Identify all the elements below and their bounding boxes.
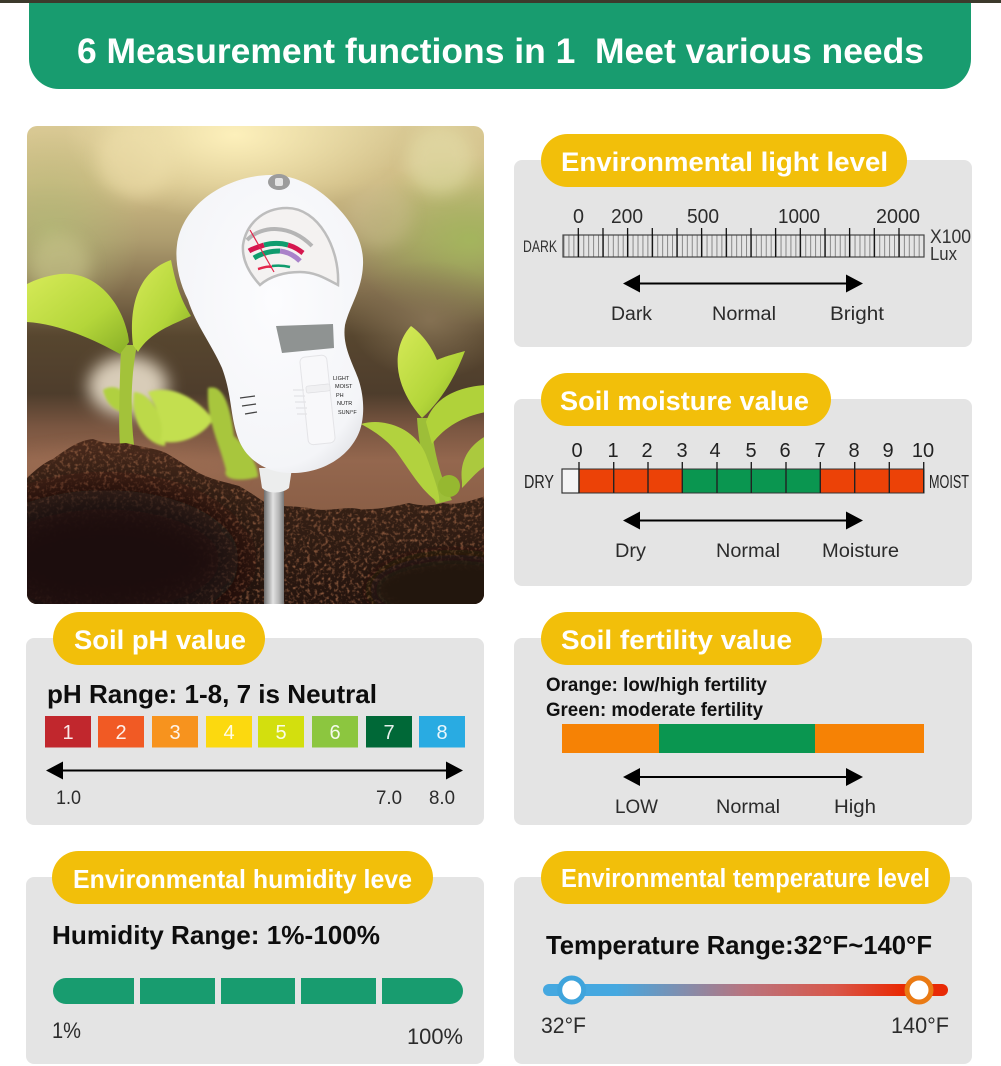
temperature slider labels xyxy=(541,1013,949,1038)
arrow labels: light: Dark xyxy=(611,304,653,325)
fertility legend text: Orange: low/high fertility xyxy=(546,675,767,696)
heading pill: pH: Soil pH value xyxy=(74,625,246,655)
pH colour scale: 7 xyxy=(383,722,395,744)
panel: soil pH value xyxy=(26,612,484,825)
pH colour scale: 4 xyxy=(223,722,235,744)
moisture scale: 5 xyxy=(745,440,757,462)
slider mode labels: MOIST xyxy=(335,384,353,390)
fertility arrow xyxy=(623,768,863,786)
heading pill: fertility xyxy=(541,612,822,665)
product photo: soil meter among seedlings xyxy=(27,126,484,604)
panel: soil moisture value xyxy=(514,373,972,586)
pH colour scale: 8 xyxy=(436,722,448,744)
heading pill: fertility: Soil fertility value xyxy=(561,625,792,655)
heading pill: light xyxy=(541,134,907,187)
fertility legend text xyxy=(546,675,767,721)
arrow: dry to moist xyxy=(623,512,863,530)
arrow labels: moisture: Normal xyxy=(716,541,780,562)
heading pill: pH xyxy=(53,612,265,665)
vent slots xyxy=(240,396,257,414)
temperature slider labels: 140°F xyxy=(891,1013,949,1038)
panel: soil fertility value xyxy=(514,612,972,825)
slider mode labels: LIGHT xyxy=(333,376,350,382)
heading pill: moisture xyxy=(541,373,831,426)
moisture scale: MOIST xyxy=(929,472,969,492)
pH colour scale: 5 xyxy=(275,722,287,744)
title: 6 Measurement functions in 1 Meet various needs xyxy=(77,32,924,71)
pH range text: pH Range: 1-8, 7 is Neutral xyxy=(47,679,377,709)
arrow: dark to bright xyxy=(623,274,863,292)
fertility arrow labels: LOW xyxy=(615,797,658,818)
fertility bar xyxy=(562,724,924,753)
moisture scale: 3 xyxy=(676,440,688,462)
top photo strip xyxy=(0,0,1001,3)
title banner xyxy=(29,3,971,89)
meter probe xyxy=(259,468,292,604)
moisture scale: 1 xyxy=(607,440,619,462)
fertility legend text: Green: moderate fertility xyxy=(546,700,763,721)
moisture scale: 4 xyxy=(709,440,721,462)
slider mode labels xyxy=(333,376,357,416)
humidity bar labels: 100% xyxy=(407,1024,463,1049)
soil xyxy=(27,439,484,604)
pH colour scale: 1 xyxy=(62,722,74,744)
fertility arrow labels: High xyxy=(834,797,876,818)
lux scale: 1000 xyxy=(778,206,820,228)
pH arrow labels: 8.0 xyxy=(429,788,455,809)
moisture scale: 10 xyxy=(912,440,934,462)
lux scale: Lux xyxy=(930,244,957,264)
humidity range text: Humidity Range: 1%-100% xyxy=(52,920,380,950)
moisture scale: 8 xyxy=(848,440,860,462)
slider mode labels: PH xyxy=(336,393,344,399)
heading pill: humidity: Environmental humidity leve xyxy=(73,864,412,894)
humidity bar xyxy=(53,978,463,1004)
moisture scale: 7 xyxy=(814,440,826,462)
moisture scale xyxy=(524,440,969,493)
analog gauge window xyxy=(243,208,338,285)
fertility arrow labels: Normal xyxy=(716,797,780,818)
moisture scale: 0 xyxy=(571,440,583,462)
arrow labels: light xyxy=(611,304,885,325)
moisture scale: DRY xyxy=(524,472,554,492)
pH arrow labels: 7.0 xyxy=(376,788,402,809)
pH colour scale: 2 xyxy=(115,722,127,744)
pH colour scale: 3 xyxy=(169,722,181,744)
humidity bar labels: 1% xyxy=(52,1018,81,1043)
temperature slider labels: 32°F xyxy=(541,1013,586,1038)
left seedling xyxy=(27,260,191,445)
lux scale: 0 xyxy=(573,206,584,228)
panel: environmental light level xyxy=(514,134,972,347)
pH arrow labels: 1.0 xyxy=(56,788,81,809)
heading pill: temperature xyxy=(541,851,950,904)
fertility arrow labels xyxy=(615,797,876,818)
arrow labels: light: Normal xyxy=(712,304,776,325)
gauge needle xyxy=(250,230,274,272)
pH colour scale: 6 xyxy=(329,722,341,744)
moisture scale: 6 xyxy=(779,440,791,462)
temperature range text: Temperature Range:32°F~140°F xyxy=(546,930,932,960)
right seedling xyxy=(361,326,486,504)
panel: environmental temperature level xyxy=(514,851,972,1064)
arrow labels: moisture: Moisture xyxy=(822,541,899,562)
light sensor xyxy=(268,174,290,190)
lux scale xyxy=(523,206,971,264)
slider mode labels: SUN/°F xyxy=(338,410,357,416)
arrow labels: light: Bright xyxy=(830,304,885,325)
pH colour scale xyxy=(45,716,465,748)
lux scale: 200 xyxy=(611,206,643,228)
heading pill: temperature: Environmental temperature level xyxy=(561,865,930,893)
moisture scale: 9 xyxy=(882,440,894,462)
lux scale: 2000 xyxy=(876,206,920,228)
lux scale: DARK xyxy=(523,237,557,256)
humidity bar labels xyxy=(52,1018,463,1049)
heading pill: humidity xyxy=(52,851,433,904)
blurred middle seedling xyxy=(103,387,258,480)
heading pill: moisture: Soil moisture value xyxy=(560,386,809,416)
lux scale: 500 xyxy=(687,206,719,228)
pH arrow xyxy=(46,762,463,780)
temperature slider xyxy=(543,978,948,1002)
arrow labels: moisture: Dry xyxy=(615,541,647,562)
moisture scale: 2 xyxy=(641,440,653,462)
heading pill: light: Environmental light level xyxy=(561,147,888,177)
LCD display xyxy=(276,324,334,353)
slider mode labels: NUTR xyxy=(337,401,352,407)
mode slider xyxy=(293,355,336,445)
pH arrow labels xyxy=(56,788,455,809)
meter body xyxy=(176,174,363,473)
panel: environmental humidity level xyxy=(26,851,484,1064)
lux scale: X100 xyxy=(930,227,971,248)
arrow labels: moisture xyxy=(615,541,899,562)
